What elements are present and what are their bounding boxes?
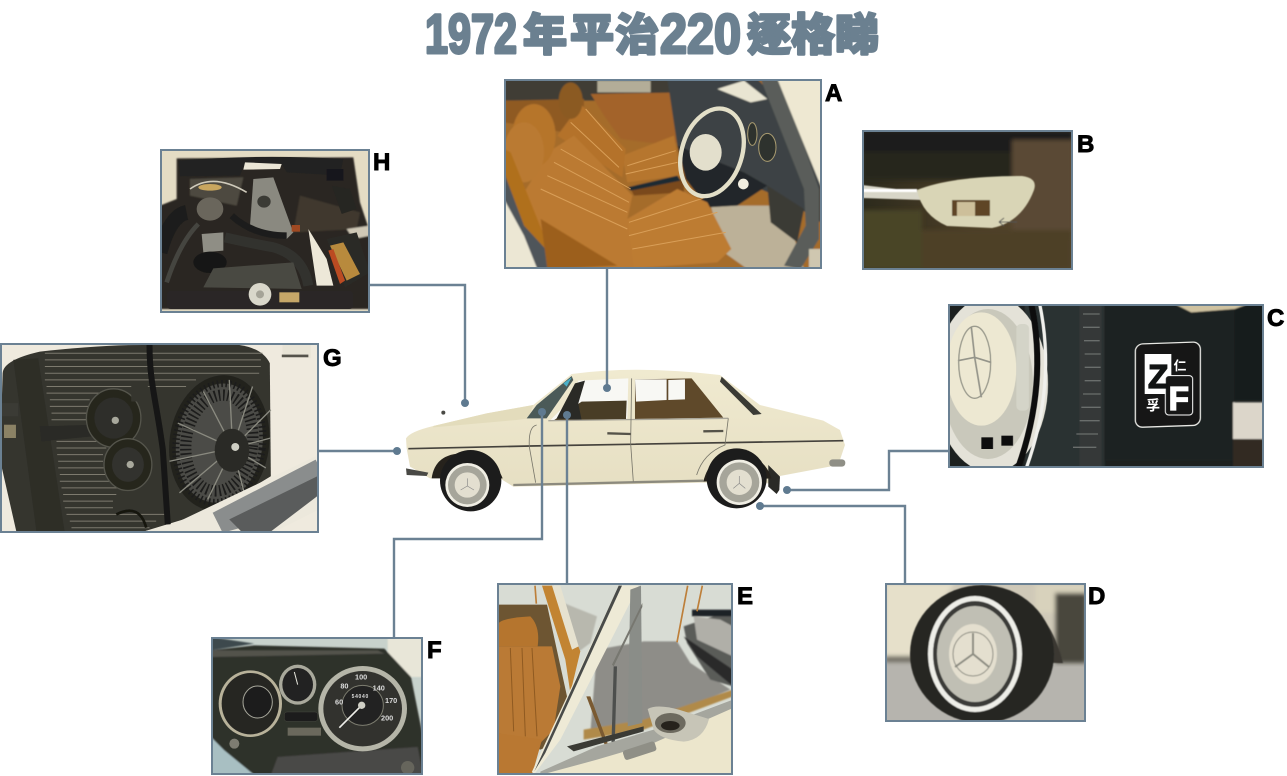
title: 220 [660, 2, 741, 65]
rear wheel arch [703, 454, 772, 482]
connector F [394, 408, 546, 637]
speedometer numbers: 54040 [352, 694, 369, 700]
frame H [161, 150, 369, 312]
front wheel [440, 450, 501, 511]
front window [550, 378, 628, 421]
Z F logo text: F [1169, 381, 1189, 418]
speedometer numbers: 80 [340, 682, 348, 691]
letter B: B [1077, 131, 1094, 158]
connector H [370, 285, 469, 407]
beltline chrome [408, 441, 843, 449]
panel F: instrument cluster [211, 637, 442, 775]
letter A: A [825, 80, 842, 107]
title: 1972 [425, 2, 517, 65]
title: 睇 [835, 0, 879, 63]
letter F: F [427, 637, 442, 664]
mud flap [768, 465, 780, 494]
wall stripes [535, 586, 702, 642]
letter E: E [737, 583, 753, 610]
rear wheel [707, 448, 767, 508]
panel E: door mirror and quarter window [497, 583, 753, 775]
rear quarter window [720, 377, 762, 415]
car illustration [406, 370, 845, 511]
letter H: H [373, 149, 390, 176]
tyre tread [1073, 314, 1101, 447]
frame D [886, 584, 1085, 721]
frame B [863, 131, 1072, 269]
rear window [635, 378, 723, 419]
windscreen [527, 376, 573, 418]
connector G [319, 447, 401, 455]
title: 格 [791, 0, 835, 63]
panel G: radiator, horns and fan [0, 343, 342, 533]
speedometer numbers: 100 [355, 673, 367, 682]
bumpers [406, 468, 428, 476]
connector C [783, 451, 948, 494]
frame E [498, 584, 732, 774]
speedometer numbers: 60 [335, 698, 343, 707]
door lines [529, 378, 728, 483]
connector D [756, 502, 905, 583]
title: 逐 [747, 0, 791, 63]
frame A [505, 80, 821, 268]
panel D: front wheel [885, 583, 1105, 723]
Z F logo text: 孚 [1146, 398, 1160, 414]
speedometer numbers: 170 [385, 696, 397, 705]
car body [406, 370, 845, 487]
letter C: C [1267, 305, 1284, 332]
panel H: engine bay [160, 149, 390, 313]
panel C: rear wheel and mud flap [935, 296, 1284, 472]
frame C [949, 305, 1263, 467]
connector E [563, 411, 571, 583]
title: 平 [570, 0, 614, 63]
frame G [1, 344, 318, 532]
Z F logo text: Z [1148, 359, 1168, 396]
letter D: D [1088, 583, 1105, 610]
Z F logo text [1146, 359, 1189, 418]
frame F [212, 638, 422, 774]
title: 年 [523, 0, 567, 63]
speedometer numbers: 140 [373, 683, 385, 692]
panel B: indicator switch [862, 130, 1094, 270]
letter G: G [323, 345, 342, 372]
Z F logo text: 仁 [1174, 359, 1187, 373]
title [425, 0, 879, 65]
panel A: interior seats [504, 79, 842, 269]
front wheel arch [432, 453, 503, 478]
speedometer numbers: 200 [381, 713, 393, 722]
speedometer numbers [335, 673, 397, 722]
hood shading [433, 405, 533, 427]
connector A [603, 269, 611, 392]
title: 治 [615, 0, 659, 63]
